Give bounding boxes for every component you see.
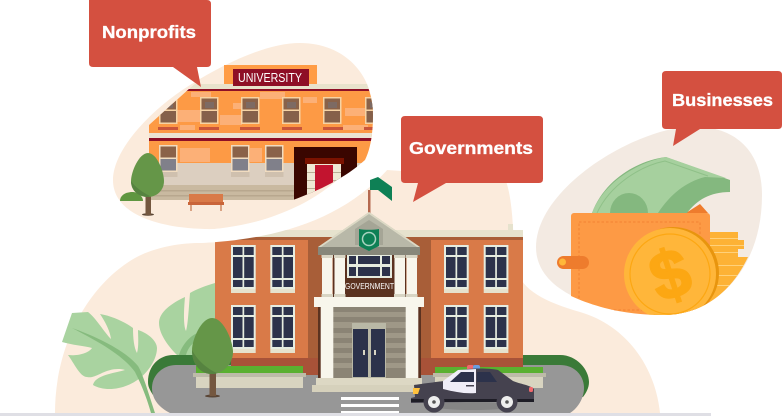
background blob: government (55, 170, 660, 413)
government tree (192, 318, 233, 398)
background blob: university (113, 43, 373, 229)
callout: Businesses (662, 71, 782, 146)
white gap between university and government (200, 170, 387, 243)
banknotes (592, 157, 730, 213)
university tree (131, 153, 164, 216)
emblem shield (359, 229, 379, 251)
background blob: wallet (536, 127, 762, 315)
wallet and money (571, 157, 750, 323)
left planter (193, 366, 306, 388)
university sign: UNIVERSITY (238, 70, 302, 85)
callout: Businesses: Businesses (672, 90, 773, 110)
government sign: GOVERNMENT (345, 281, 394, 291)
university bush (120, 192, 143, 201)
gold coin: $ (641, 233, 700, 317)
government building (215, 224, 523, 375)
bench (188, 194, 224, 211)
gold coin (624, 227, 719, 320)
road (152, 365, 584, 413)
flag (368, 177, 392, 214)
callout: Nonprofits (89, 0, 211, 87)
right planter (433, 367, 546, 388)
police car (411, 365, 534, 412)
monstera leaf behind building (159, 283, 215, 355)
callout: Nonprofits: Nonprofits (102, 22, 196, 42)
callout: Governments: Governments (409, 138, 533, 158)
ground line (0, 413, 711, 416)
monstera leaf left (62, 312, 157, 413)
crosswalk (341, 397, 399, 413)
university building (148, 65, 384, 200)
wallet clasp (557, 256, 589, 269)
road curb (148, 355, 589, 397)
callout: Governments (401, 116, 543, 202)
portico (312, 212, 425, 392)
coin stacks (710, 232, 748, 302)
